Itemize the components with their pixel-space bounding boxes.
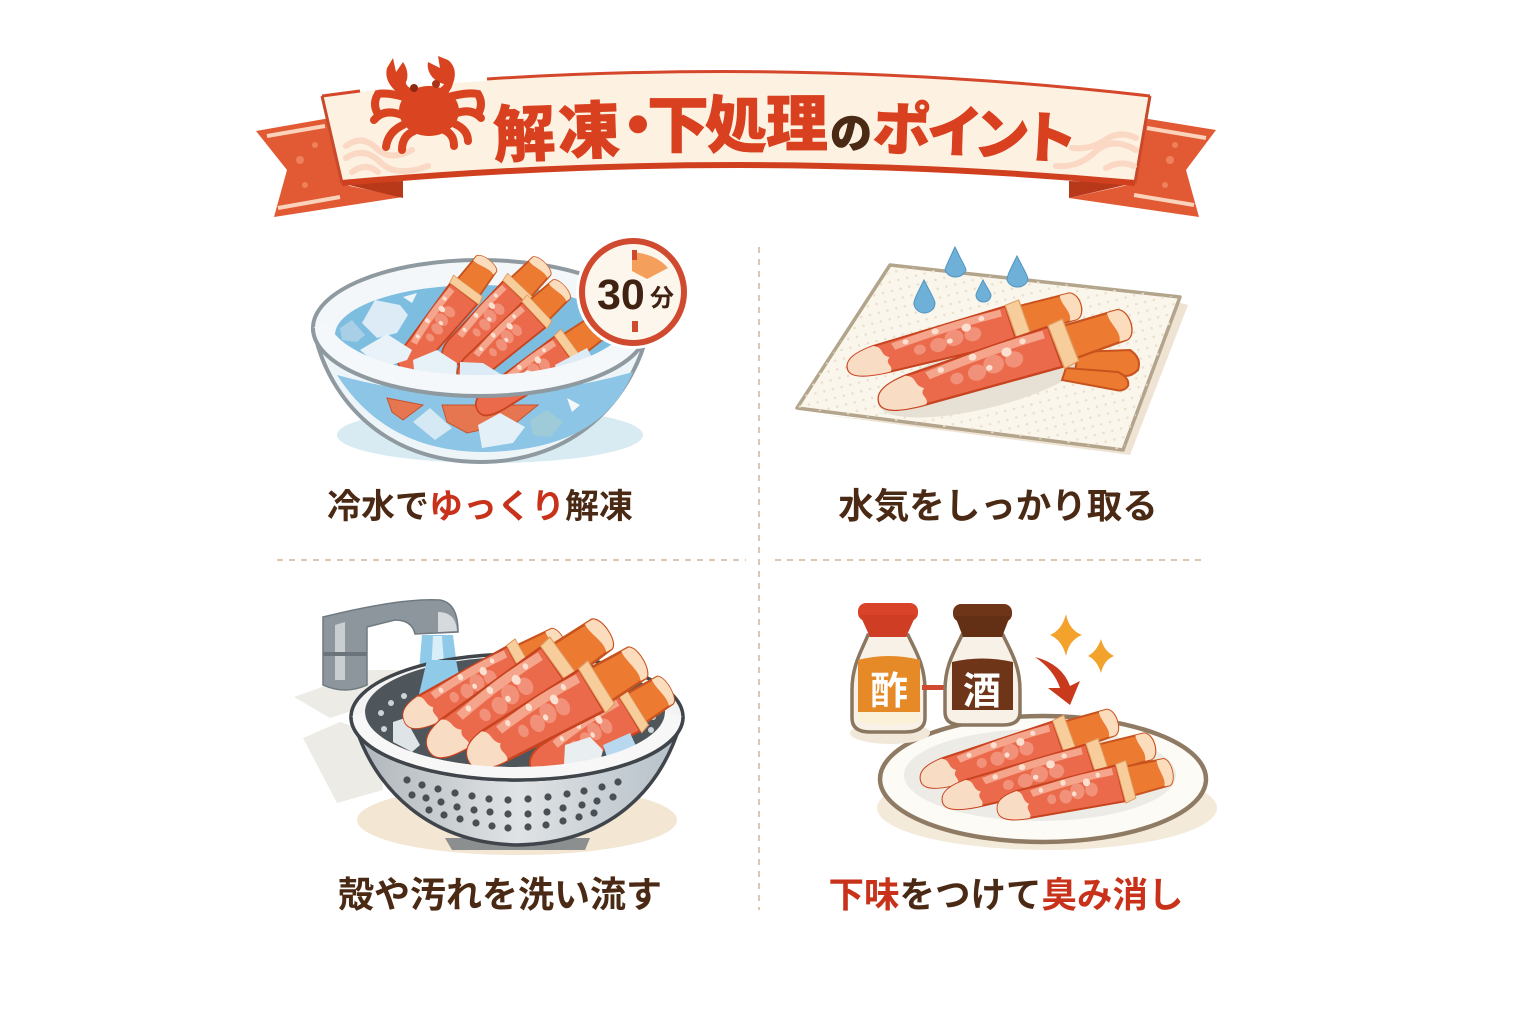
icon: connector	[922, 685, 947, 690]
icon: 30 minute timer: 分	[650, 285, 674, 312]
title text	[492, 91, 1079, 171]
title text: 解	[492, 100, 556, 171]
wave decoration left	[346, 140, 428, 172]
banner panel	[322, 72, 1150, 183]
icon: water drops	[914, 247, 1028, 313]
title text: ・	[607, 93, 669, 162]
title text: 理	[766, 91, 828, 160]
icon: bottle of sake	[945, 604, 1020, 725]
title text: ン	[972, 103, 1031, 168]
icon: sparkles	[1050, 614, 1114, 673]
ribbon tail left	[256, 118, 403, 217]
panel: season to remove odor	[828, 603, 1217, 915]
dashed horizontal divider right	[775, 559, 1207, 561]
illustration: glass bowl with crab legs and ice	[313, 249, 647, 463]
title text: 凍	[557, 97, 621, 168]
icon: bottle of vinegar	[850, 603, 930, 744]
illustration: paper towel with crab legs	[797, 265, 1188, 455]
panel: remove moisture	[797, 247, 1188, 526]
icon: bottle of sake: 酒	[963, 671, 1001, 713]
icon: crab	[374, 56, 481, 150]
title text: ポ	[872, 97, 932, 164]
dashed vertical divider	[758, 247, 760, 910]
caption: 殻や汚れを洗い流す	[338, 874, 662, 915]
illustration: faucet and colander with crab legs	[294, 600, 683, 855]
caption: 冷水でゆっくり解凍	[327, 488, 633, 526]
wave decoration right	[1056, 134, 1136, 168]
icon: bottle of vinegar: 酢	[870, 671, 908, 713]
title banner	[256, 56, 1216, 217]
title text: の	[830, 110, 872, 157]
icon: 30 minute timer: 30	[597, 271, 645, 319]
caption: 水気をしっかり取る	[838, 486, 1158, 526]
panel: thaw in cold water	[313, 235, 690, 526]
title text: イ	[926, 100, 984, 165]
caption: 下味をつけて臭み消し	[828, 875, 1184, 915]
title text: 下	[647, 92, 709, 161]
panel: rinse shell and dirt	[294, 600, 683, 915]
title text: ト	[1020, 106, 1079, 171]
arrow	[1035, 657, 1080, 705]
ribbon tail right	[1069, 118, 1216, 217]
icon: 30 minute timer	[576, 235, 690, 349]
illustration: plate with crab legs	[877, 702, 1217, 850]
dashed horizontal divider left	[277, 559, 746, 561]
title text: 処	[705, 92, 767, 161]
